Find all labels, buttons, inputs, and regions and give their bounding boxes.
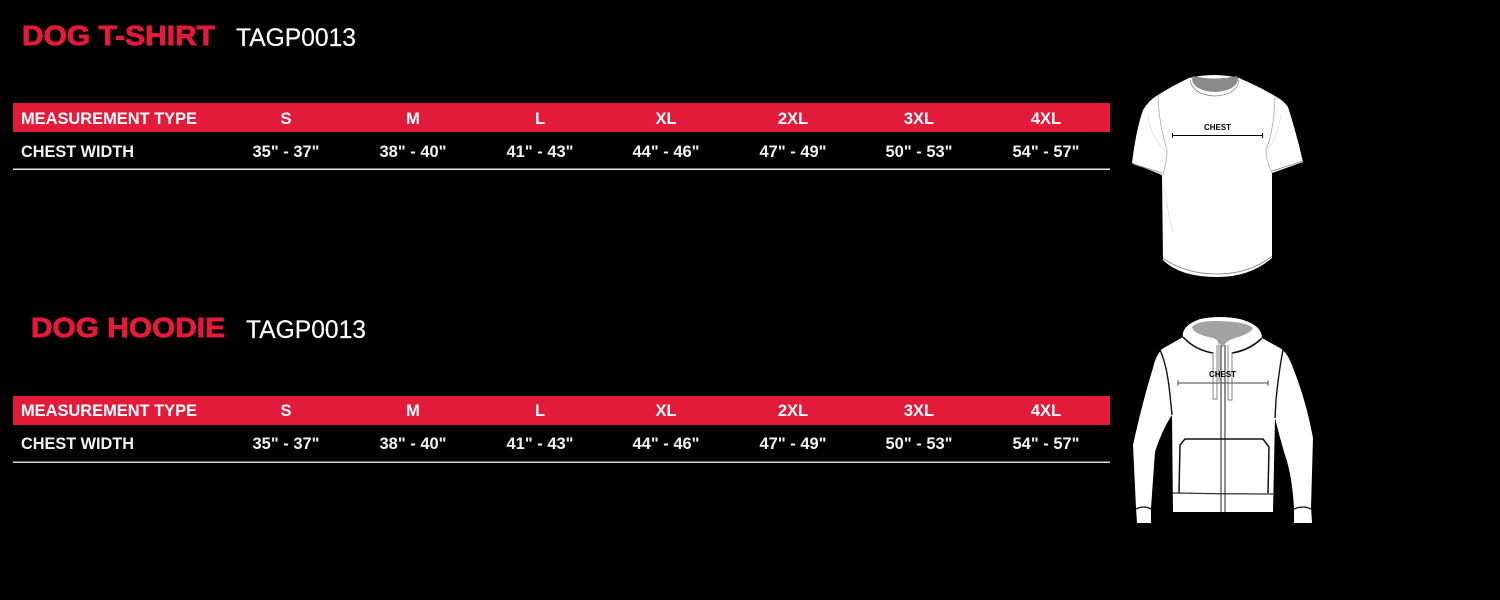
- table row: hoodie chest width: [13, 435, 1110, 463]
- table header: hoodie: S: [280, 402, 292, 420]
- product code: t-shirt: TAGP0013: [236, 24, 356, 52]
- table row: t-shirt chest width: 44" - 46": [632, 143, 700, 161]
- table row: hoodie chest width: 50" - 53": [885, 435, 953, 453]
- table header: t-shirt: 4XL: [1031, 110, 1061, 128]
- label: chest: CHEST: [1209, 370, 1236, 379]
- table row: t-shirt chest width: 41" - 43": [506, 143, 574, 161]
- title: dog hoodie: DOG HOODIE: [31, 312, 225, 343]
- table header: hoodie: XL: [655, 402, 677, 420]
- table header: hoodie: [13, 396, 1110, 425]
- table header: hoodie: 3XL: [904, 402, 934, 420]
- table row: t-shirt chest width: 47" - 49": [759, 143, 827, 161]
- table row: t-shirt chest width: CHEST WIDTH: [21, 143, 134, 161]
- table row: hoodie chest width: CHEST WIDTH: [21, 435, 134, 453]
- table row: hoodie chest width: 35" - 37": [252, 435, 320, 453]
- table header: t-shirt: MEASUREMENT TYPE: [21, 110, 197, 128]
- table row: hoodie chest width: 54" - 57": [1012, 435, 1080, 453]
- table: t-shirt sizes: [13, 103, 1110, 170]
- label: chest: CHEST: [1204, 123, 1231, 132]
- table header: t-shirt: L: [535, 110, 545, 128]
- table row: t-shirt chest width: 54" - 57": [1012, 143, 1080, 161]
- product code: hoodie: TAGP0013: [246, 316, 366, 344]
- table header: hoodie: MEASUREMENT TYPE: [21, 402, 197, 420]
- table header: t-shirt: 2XL: [778, 110, 808, 128]
- table row: t-shirt chest width: 50" - 53": [885, 143, 953, 161]
- icon: hoodie with chest measurement: [1133, 317, 1313, 523]
- table row: hoodie chest width: 44" - 46": [632, 435, 700, 453]
- table header: t-shirt: M: [406, 110, 420, 128]
- table header: t-shirt: S: [280, 110, 292, 128]
- title: dog t-shirt: DOG T-SHIRT: [22, 20, 215, 51]
- table header: hoodie: 2XL: [778, 402, 808, 420]
- table: hoodie sizes: [13, 396, 1110, 463]
- table row: t-shirt chest width: 35" - 37": [252, 143, 320, 161]
- arrow: chest width: [1172, 133, 1262, 138]
- table header: hoodie: L: [535, 402, 545, 420]
- arrow: chest width: [1178, 380, 1268, 386]
- table header: hoodie: 4XL: [1031, 402, 1061, 420]
- table header: hoodie: M: [406, 402, 420, 420]
- table header: t-shirt: 3XL: [904, 110, 934, 128]
- table row: t-shirt chest width: 38" - 40": [379, 143, 447, 161]
- table row: t-shirt chest width: [13, 143, 1110, 170]
- table header: t-shirt: XL: [655, 110, 677, 128]
- table row: hoodie chest width: 47" - 49": [759, 435, 827, 453]
- table header: t-shirt: [13, 103, 1110, 132]
- table row: hoodie chest width: 41" - 43": [506, 435, 574, 453]
- table row: hoodie chest width: 38" - 40": [379, 435, 447, 453]
- icon: t-shirt with chest measurement: [1132, 75, 1303, 277]
